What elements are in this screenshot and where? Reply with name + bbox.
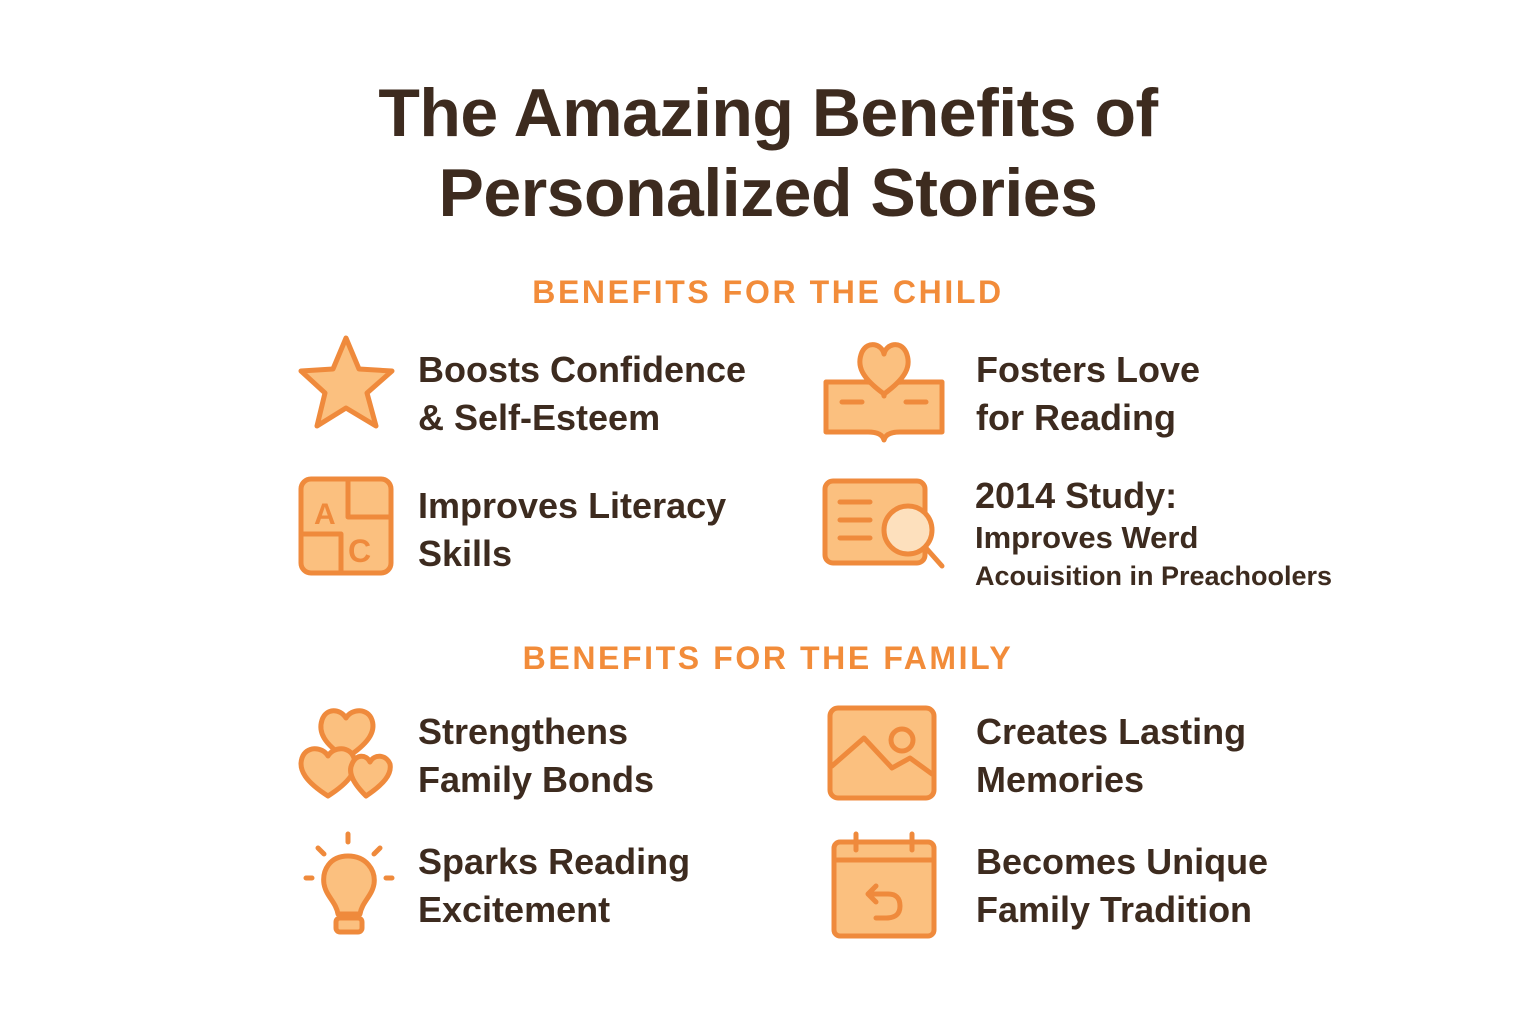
- text: memories: [976, 711, 1246, 800]
- icon: star: [298, 336, 394, 428]
- text: study: Acouisition in Preachoolers: [975, 561, 1332, 591]
- icon: document magnifier: [822, 478, 944, 568]
- text: family bonds: Strengthens: [418, 711, 628, 752]
- title: The Amazing Benefits of: [378, 75, 1158, 151]
- text: confidence: [418, 349, 746, 438]
- text: tradition: [976, 841, 1268, 930]
- text: literacy: Skills: [418, 533, 512, 574]
- text: confidence: & Self-Esteem: [418, 397, 660, 438]
- icon: picture: [828, 706, 936, 800]
- text: family bonds: Family Bonds: [418, 759, 654, 800]
- text: family bonds: [418, 711, 654, 800]
- icon: ABC blocks: A: [314, 498, 336, 531]
- heading: child: BENEFITS FOR THE CHILD: [532, 274, 1004, 310]
- text: confidence: Boosts Confidence: [418, 349, 746, 390]
- text: literacy: Improves Literacy: [418, 485, 726, 526]
- text: reading excitement: Sparks Reading: [418, 841, 690, 882]
- icon: book heart: [824, 342, 944, 442]
- title: [378, 75, 1158, 231]
- text: study: 2014 Study:: [975, 475, 1177, 516]
- text: love reading: [976, 349, 1200, 438]
- text: reading excitement: Excitement: [418, 889, 610, 930]
- text: study: Improves Werd: [975, 520, 1198, 555]
- icon: calendar: [832, 832, 936, 938]
- text: memories: Memories: [976, 759, 1144, 800]
- text: literacy: [418, 485, 726, 574]
- text: love reading: for Reading: [976, 397, 1176, 438]
- icon: lightbulb: [304, 832, 394, 934]
- text: tradition: Becomes Unique: [976, 841, 1268, 882]
- text: reading excitement: [418, 841, 690, 930]
- text: tradition: Family Tradition: [976, 889, 1252, 930]
- text: study: [975, 475, 1332, 591]
- heading: family: BENEFITS FOR THE FAMILY: [523, 640, 1013, 676]
- icon: hearts: [298, 708, 393, 799]
- icon: ABC blocks: C: [348, 533, 371, 569]
- icon: ABC blocks: [298, 476, 394, 576]
- title: Personalized Stories: [439, 155, 1097, 231]
- text: memories: Creates Lasting: [976, 711, 1246, 752]
- text: love reading: Fosters Love: [976, 349, 1200, 390]
